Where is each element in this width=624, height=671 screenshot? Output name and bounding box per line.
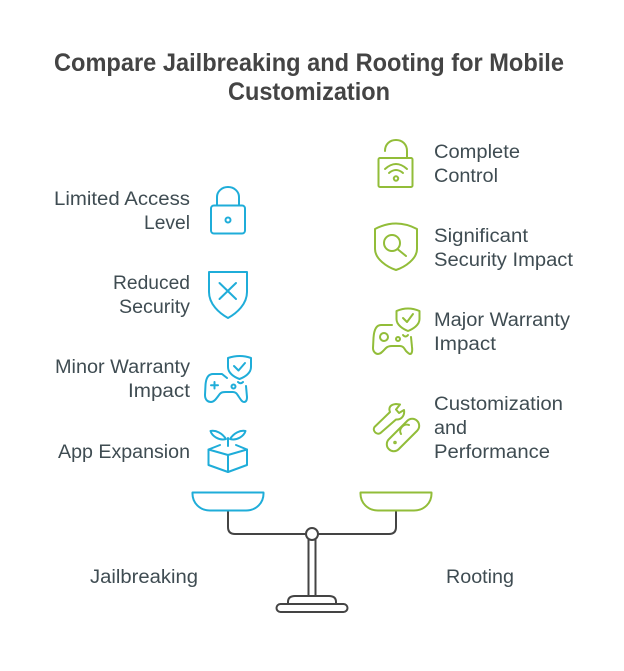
scale beam and arms — [228, 511, 396, 534]
text: complete control: Control — [434, 166, 498, 187]
text: customization and performance — [434, 394, 563, 463]
icon: padlock — [211, 187, 245, 234]
text: limited access level: Limited Access — [54, 189, 190, 210]
text: limited access level: Level — [144, 213, 190, 234]
label: rooting: Rooting — [446, 567, 514, 588]
text: significant security impact — [434, 226, 574, 271]
left pan — [192, 492, 264, 510]
text: minor warranty impact: Minor Warranty — [55, 357, 191, 378]
title: Compare Jailbreaking and Rooting for Mobile — [54, 49, 564, 77]
panel: rooting traits — [373, 140, 574, 463]
base — [276, 596, 348, 612]
text: customization and performance: and — [434, 418, 467, 439]
icon: game controller with shield — [205, 356, 251, 402]
text: limited access level — [54, 189, 190, 234]
panel: jailbreaking traits — [54, 187, 251, 472]
text: customization and performance: Customization — [434, 394, 563, 415]
text: reduced security — [113, 273, 191, 318]
text: reduced security: Security — [119, 297, 191, 318]
text: complete control: Complete — [434, 142, 520, 163]
right pan — [360, 492, 432, 510]
title: Customization — [228, 78, 390, 106]
text: app expansion: App Expansion — [58, 442, 190, 463]
text: customization and performance: Performance — [434, 442, 550, 463]
balance scale — [192, 492, 432, 612]
text: significant security impact: Significant — [434, 226, 529, 247]
text: minor warranty impact: Impact — [128, 381, 191, 402]
icon: box with sprout — [208, 431, 247, 472]
text: major warranty impact — [434, 310, 571, 355]
pole — [308, 539, 316, 596]
icon: wrench and multitool — [374, 404, 422, 454]
pivot — [306, 528, 318, 540]
icon: shield with cross — [209, 272, 247, 318]
text: major warranty impact: Impact — [434, 334, 497, 355]
text: major warranty impact: Major Warranty — [434, 310, 571, 331]
icon: shield with magnifier — [375, 224, 417, 270]
icon: padlock with wifi — [378, 140, 412, 187]
text: significant security impact: Security Impact — [434, 250, 574, 271]
title — [54, 49, 564, 106]
label: jailbreaking: Jailbreaking — [90, 567, 198, 588]
text: minor warranty impact — [55, 357, 191, 402]
text: complete control — [434, 142, 520, 187]
icon: game controller with shield — [373, 308, 420, 354]
text: reduced security: Reduced — [113, 273, 190, 294]
